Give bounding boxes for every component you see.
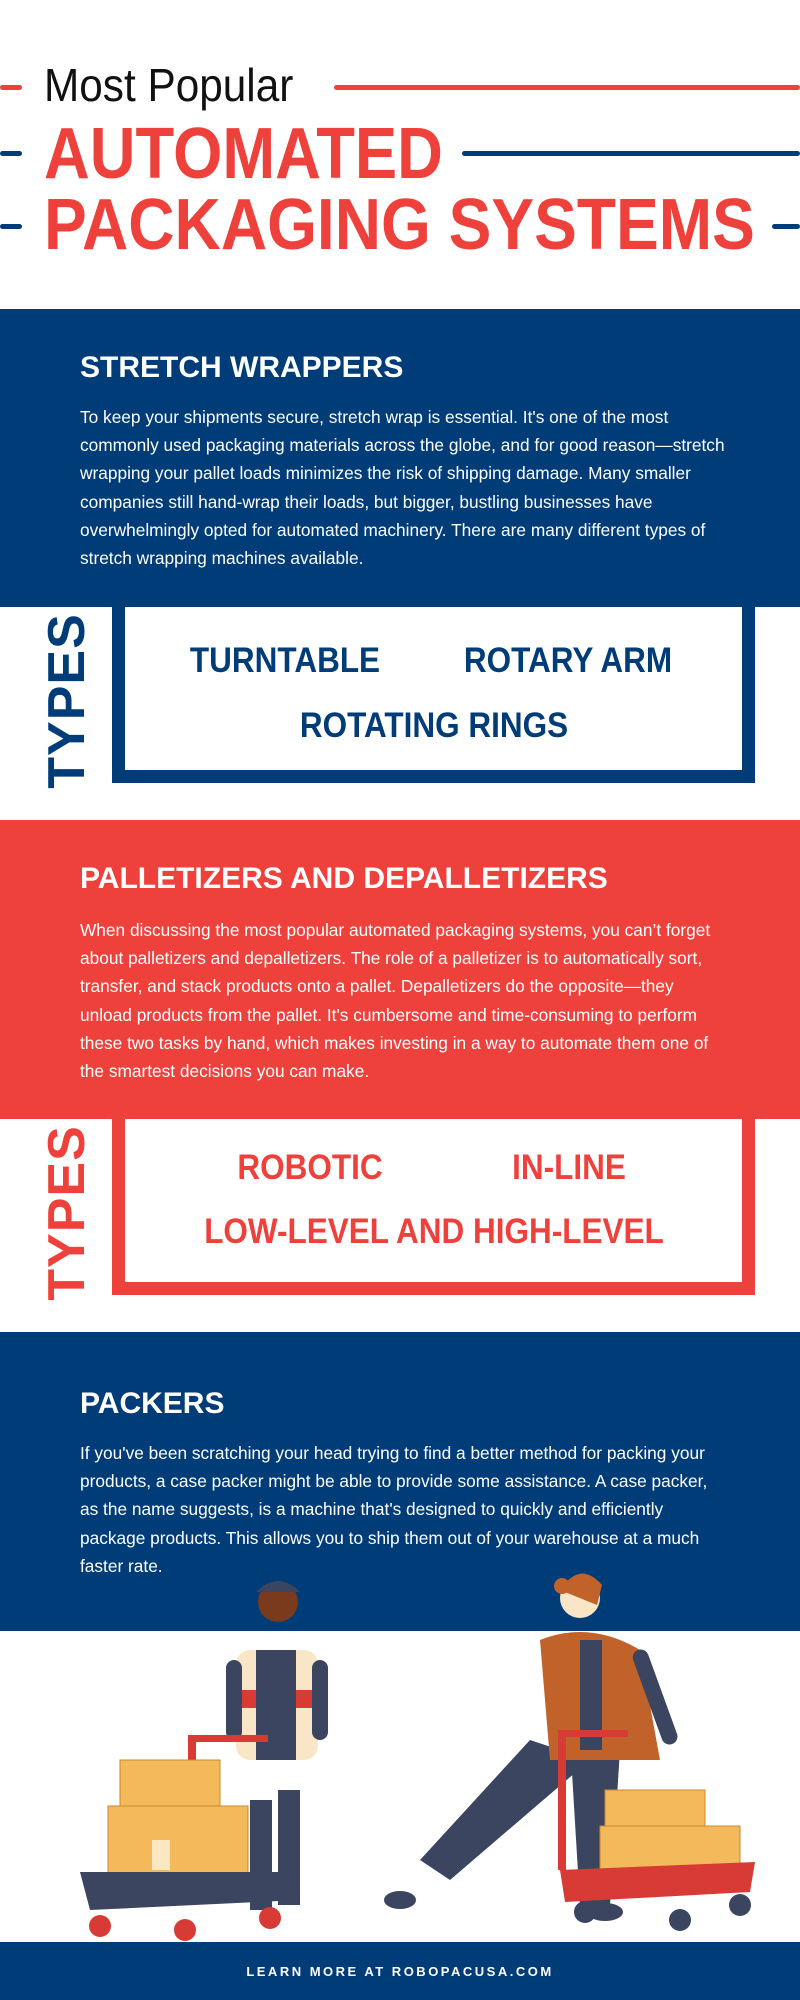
panel: packers	[0, 1332, 800, 1631]
type: low-level and high-level: LOW-LEVEL AND HIGH-LEVEL	[204, 1212, 664, 1251]
title: Most Popular	[44, 59, 293, 111]
type: in-line: IN-LINE	[512, 1148, 626, 1187]
text: stretch wrappers: To keep your shipments secure, stretch wrap is essential. It's one of the most commonly used packaging materials across the globe, and for good reason—stretch wrapping your pallet loads minimizes the risk of shipping damage. Many smaller companies still hand-wrap their loads, but bigger, bustling businesses have overwhelmingly opted for automated machinery. There are many different types of stretch wrapping machines available.	[80, 407, 725, 568]
text: palletizers: When discussing the most popular automated packaging systems, you can’t forget about palletizers and depalletizers. The role of a palletizer is to automatically sort, transfer, and stack products onto a pallet. Depalletizers do the opposite—they unload products from the pallet. It's cumbersome and time-consuming to perform these two tasks by hand, which makes investing in a way to automate them one of the smartest decisions you can make.	[80, 920, 710, 1081]
type: turntable: TURNTABLE	[190, 641, 380, 680]
worker 2	[384, 1574, 755, 1931]
type: rotating rings: ROTATING RINGS	[300, 706, 568, 745]
footer	[0, 1942, 800, 2000]
panel: palletizer types	[38, 1119, 755, 1301]
panel: palletizers	[0, 820, 800, 1119]
illustration: workers with carts	[80, 1574, 755, 1941]
footer text: LEARN MORE AT ROBOPACUSA.COM	[246, 1964, 554, 1979]
type: robotic: ROBOTIC	[237, 1148, 383, 1187]
label: types: TYPES	[38, 613, 96, 789]
type: rotary arm: ROTARY ARM	[464, 641, 672, 680]
heading: palletizers: PALLETIZERS AND DEPALLETIZERS	[80, 862, 608, 895]
panel: stretch wrappers	[0, 309, 800, 607]
title: PACKAGING SYSTEMS	[44, 185, 755, 265]
worker 1	[80, 1581, 328, 1941]
title: AUTOMATED	[44, 114, 443, 194]
heading: packers: PACKERS	[80, 1387, 224, 1420]
panel: stretch wrapper types	[38, 607, 755, 789]
label: types: TYPES	[38, 1125, 96, 1301]
heading: stretch wrappers: STRETCH WRAPPERS	[80, 351, 403, 384]
title	[0, 59, 800, 265]
text: packers: If you've been scratching your head trying to find a better method for packing your products, a case packer might be able to provide some assistance. A case packer, as the name suggests, is a machine that's designed to quickly and efficiently package products. This allows you to ship them out of your warehouse at a much faster rate.	[80, 1443, 707, 1576]
